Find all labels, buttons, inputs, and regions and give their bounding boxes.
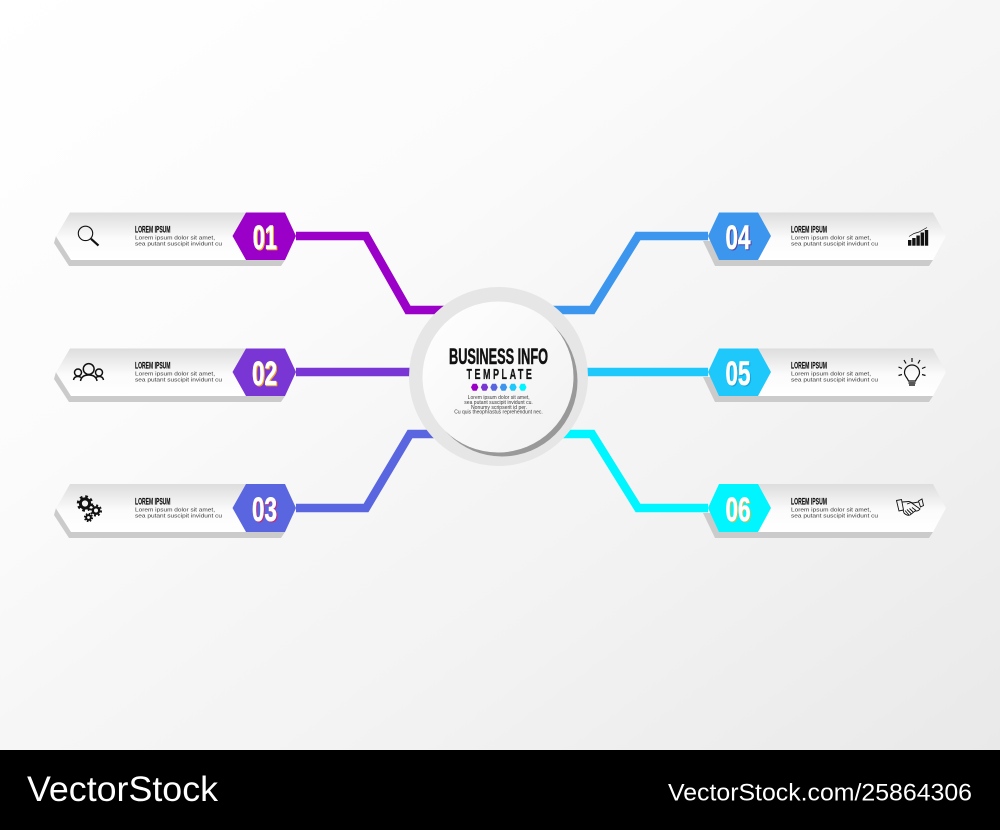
footer image id: VectorStock.com/25864306	[668, 780, 972, 806]
central paragraph	[454, 395, 543, 416]
text block 05: sea putant suscipit invidunt cu	[791, 378, 878, 384]
central paragraph: Nonumy scripserit id per.	[471, 405, 527, 411]
central heading: BUSINESS INFO	[449, 344, 548, 369]
text block 04	[791, 225, 878, 248]
text block 02: LOREM IPSUM	[135, 361, 171, 372]
central heading: TEMPLATE	[466, 365, 534, 382]
text block 05: LOREM IPSUM	[791, 361, 827, 372]
icon: people group	[74, 364, 104, 381]
text block 04: LOREM IPSUM	[791, 225, 827, 236]
connector 01	[296, 236, 445, 310]
number hexagon 06: 06	[726, 491, 750, 529]
number hexagon 02: 02	[253, 356, 278, 394]
central paragraph: sea putant suscipit invidunt cu.	[464, 400, 533, 406]
number hexagon 04	[708, 212, 771, 260]
number hexagon 03: 03	[253, 492, 278, 530]
text block 04: sea putant suscipit invidunt cu	[791, 242, 878, 248]
central heading	[449, 344, 548, 382]
number hexagon 01: 01	[253, 219, 277, 257]
text block 01: LOREM IPSUM	[135, 225, 171, 236]
number hexagon 04: 04	[726, 220, 752, 258]
panel: step 04	[703, 212, 946, 266]
text block 01: sea putant suscipit invidunt cu	[135, 242, 222, 248]
text block 03: sea putant suscipit invidunt cu	[135, 514, 222, 520]
text block 03: LOREM IPSUM	[135, 497, 171, 508]
text block 02: Lorem ipsum dolor sit amet,	[135, 372, 215, 378]
icon: handshake	[896, 499, 924, 515]
number hexagon 05: 05	[726, 355, 750, 393]
number hexagon 01	[232, 212, 296, 260]
number hexagon 05	[708, 348, 771, 396]
number hexagon 01: 01	[254, 220, 278, 258]
connector 05	[586, 368, 708, 376]
panel: step 05	[703, 348, 946, 402]
text block 01	[135, 225, 222, 248]
number hexagon 06	[708, 484, 771, 532]
panel: step 02	[54, 348, 296, 402]
hexagon colour dots	[471, 384, 526, 391]
connector 04	[552, 236, 708, 310]
text block 04: Lorem ipsum dolor sit amet,	[791, 236, 871, 242]
text block 06: LOREM IPSUM	[791, 497, 827, 508]
footer logo: VectorStock	[27, 770, 219, 809]
number hexagon 02: 02	[252, 355, 277, 393]
panel: central circle	[409, 287, 588, 466]
number hexagon 04: 04	[726, 219, 751, 257]
footer bar	[0, 750, 1000, 830]
text block 01: Lorem ipsum dolor sit amet,	[135, 236, 215, 242]
number hexagon 03	[232, 484, 296, 532]
panel: step 01	[54, 212, 296, 266]
text block 03	[135, 497, 222, 520]
number hexagon 02	[232, 348, 296, 396]
connector 02	[296, 368, 412, 376]
connector 03	[296, 434, 440, 508]
text block 06: sea putant suscipit invidunt cu	[791, 514, 878, 520]
number hexagon 06: 06	[726, 492, 752, 530]
panel: step 06	[703, 484, 946, 538]
text block 03: Lorem ipsum dolor sit amet,	[135, 508, 215, 514]
icon: bar chart	[908, 228, 928, 246]
text block 05: Lorem ipsum dolor sit amet,	[791, 372, 871, 378]
number hexagon 05: 05	[726, 356, 752, 394]
text block 02: sea putant suscipit invidunt cu	[135, 378, 222, 384]
central paragraph: Cu quis theophrastus reprehendunt nec.	[454, 410, 543, 416]
text block 05	[791, 361, 878, 384]
text block 02	[135, 361, 222, 384]
icon: magnifier	[78, 226, 98, 246]
text block 06: Lorem ipsum dolor sit amet,	[791, 508, 871, 514]
connector 06	[560, 434, 708, 508]
panel: step 03	[54, 484, 296, 538]
icon: gears	[78, 496, 101, 521]
number hexagon 03: 03	[252, 491, 277, 529]
central paragraph: Lorem ipsum dolor sit amet,	[468, 395, 530, 401]
icon: light bulb	[898, 358, 926, 385]
text block 06	[791, 497, 878, 520]
